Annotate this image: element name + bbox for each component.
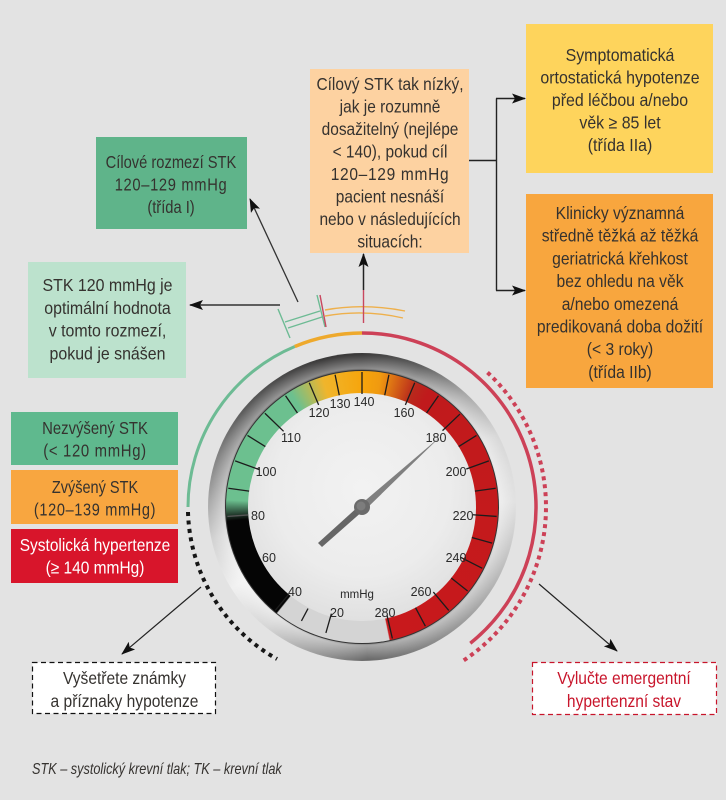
panel: optimal value 120 mmHg: optimální hodnota xyxy=(44,298,171,318)
legend: non-elevated: (< 120 mmHg) xyxy=(43,442,147,461)
callout: check hypotension: a příznaky hypotenze xyxy=(51,691,198,711)
panel: target as low as reasonably achievable: 120–129 mmHg xyxy=(331,164,449,184)
gauge scale numbers: 240 xyxy=(446,551,466,565)
gauge scale numbers: 100 xyxy=(256,465,276,479)
callout: exclude hypertensive emergency: Vylučte emergentní xyxy=(557,668,691,688)
gauge scale numbers: 280 xyxy=(375,606,395,620)
gauge dial xyxy=(200,345,524,669)
panel: class IIb conditions: (třída IIb) xyxy=(588,362,652,382)
gauge scale numbers: 200 xyxy=(446,465,466,479)
panel: target as low as reasonably achievable: dosažitelný (nejlépe xyxy=(322,119,458,139)
panel: class IIa conditions: před léčbou a/nebo xyxy=(552,90,688,110)
gauge scale numbers: mmHg xyxy=(340,589,374,601)
gauge scale numbers: 130 xyxy=(330,397,350,411)
gauge scale numbers: 40 xyxy=(288,585,302,599)
gauge scale numbers: 160 xyxy=(394,406,414,420)
gauge scale numbers: 140 xyxy=(354,395,374,409)
arrow: to target range xyxy=(250,199,298,302)
panel: class IIb conditions: středně těžká až těžká xyxy=(542,226,699,246)
panel: class IIb conditions: geriatrická křehkost xyxy=(552,249,688,269)
gauge scale numbers: 80 xyxy=(251,509,265,523)
gauge scale numbers: 260 xyxy=(411,585,431,599)
gauge scale numbers xyxy=(251,395,473,620)
legend: systolic hypertension: (≥ 140 mmHg) xyxy=(46,558,144,578)
panel: optimal value 120 mmHg: v tomto rozmezí, xyxy=(49,321,166,341)
callout: check hypotension: Vyšetřete známky xyxy=(63,668,187,688)
legend: systolic hypertension xyxy=(11,529,178,583)
gauge ticks xyxy=(227,372,497,639)
panel: target as low as reasonably achievable xyxy=(310,69,469,253)
gauge scale numbers: 180 xyxy=(426,431,446,445)
legend: elevated xyxy=(11,470,178,524)
outer range arcs xyxy=(188,333,546,661)
gauge scale numbers: 110 xyxy=(281,431,301,445)
panel: target range class I: (třída I) xyxy=(147,198,195,218)
panel: optimal value 120 mmHg: STK 120 mmHg je xyxy=(42,275,173,295)
callout: exclude hypertensive emergency xyxy=(532,662,716,714)
panel: class IIb conditions: Klinicky významná xyxy=(556,203,685,223)
callout: exclude hypertensive emergency: hypertenzní stav xyxy=(567,691,682,711)
legend: non-elevated xyxy=(11,412,178,465)
legend: non-elevated: Nezvýšený STK xyxy=(42,419,148,438)
gauge xyxy=(200,345,524,669)
panel: optimal value 120 mmHg xyxy=(28,262,186,378)
panel: class IIb conditions xyxy=(526,194,713,388)
arrow: to low target xyxy=(362,254,364,290)
gauge scale numbers: 120 xyxy=(309,406,329,420)
panel: target as low as reasonably achievable: Cílový STK tak nízký, xyxy=(316,74,464,94)
panel: class IIb conditions: bez ohledu na věk xyxy=(556,271,684,291)
panel: class IIa conditions: ortostatická hypotenze xyxy=(540,68,700,88)
gauge scale numbers: 220 xyxy=(453,509,473,523)
panel: target as low as reasonably achievable: jak je rozumně xyxy=(339,97,440,117)
panel: target range class I xyxy=(96,137,247,229)
panel: target range class I: 120–129 mmHg xyxy=(115,175,227,195)
panel: target as low as reasonably achievable: < 140), pokud cíl xyxy=(333,142,447,162)
panel: class IIb conditions: (< 3 roky) xyxy=(587,339,653,359)
panel: class IIa conditions: věk ≥ 85 let xyxy=(579,113,661,133)
arrows: branch to class IIa and IIb xyxy=(469,98,525,290)
panel: class IIa conditions: (třída IIa) xyxy=(588,135,652,155)
legend: systolic hypertension: Systolická hypertenze xyxy=(20,535,170,555)
panel: target range class I: Cílové rozmezí STK xyxy=(106,153,237,172)
gauge needle xyxy=(318,436,441,547)
arrow: to optimal value xyxy=(190,304,280,306)
panel: class IIa conditions xyxy=(526,24,713,173)
legend: elevated: (120–139 mmHg) xyxy=(34,500,156,520)
panel: target as low as reasonably achievable: situacích: xyxy=(357,232,423,252)
panel: optimal value 120 mmHg: pokud je snášen xyxy=(50,344,165,364)
legend: elevated: Zvýšený STK xyxy=(52,478,138,497)
gauge scale numbers: 20 xyxy=(330,606,344,620)
panel: target as low as reasonably achievable: pacient nesnáší xyxy=(336,187,445,207)
panel: class IIa conditions: Symptomatická xyxy=(566,45,675,65)
gauge scale numbers: 60 xyxy=(262,551,276,565)
panel: target as low as reasonably achievable: nebo v následujících xyxy=(319,209,461,229)
arrow: to hypotension check xyxy=(122,587,201,654)
arrow: to emergency check xyxy=(539,584,617,651)
footnote: STK – systolický krevní tlak; TK – krevní tlak xyxy=(32,761,283,778)
panel: class IIb conditions: predikovaná doba dožití xyxy=(537,317,703,337)
callout: check hypotension xyxy=(32,662,216,714)
target range brackets xyxy=(278,290,405,338)
panel: class IIb conditions: a/nebo omezená xyxy=(562,294,679,314)
